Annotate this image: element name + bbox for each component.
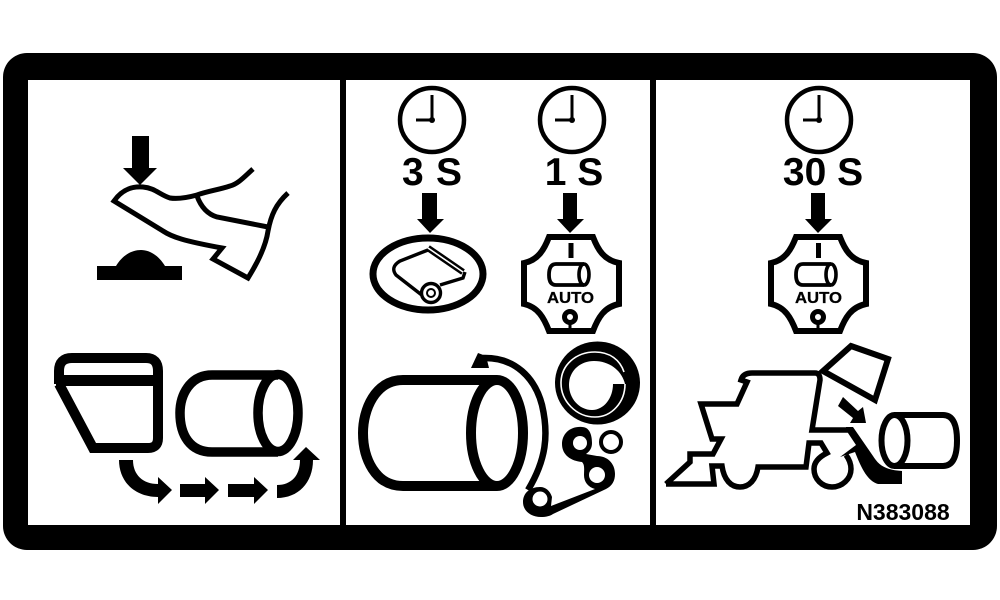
icon: clock 30 s bbox=[787, 88, 851, 152]
icon: arrow bbox=[417, 193, 444, 233]
icon: diagonal arrow bbox=[838, 397, 866, 423]
icon: clock 3 s bbox=[400, 88, 464, 152]
panel: wait and eject bbox=[666, 88, 957, 525]
icon: curved arrow out bbox=[119, 460, 172, 504]
text: 1 S: 1 S bbox=[545, 151, 603, 194]
icon: down arrow onto foot bbox=[123, 136, 157, 185]
icon: auto knob: AUTO bbox=[795, 290, 842, 307]
icon: baler machine bbox=[666, 373, 902, 487]
icon: pulleys and belt bbox=[523, 427, 621, 517]
panel: timers and controls bbox=[363, 88, 640, 517]
icon: net roll bbox=[555, 342, 640, 424]
icon: rotation arrow with belt bbox=[471, 353, 545, 490]
icon: straight arrow bbox=[228, 477, 268, 504]
icon: straight arrow bbox=[180, 477, 219, 504]
icon: auto knob bbox=[771, 237, 866, 331]
text: part number: N383088 bbox=[856, 499, 950, 525]
icon: large bale bbox=[363, 380, 523, 486]
icon: ejecting bale in chamber bbox=[823, 346, 888, 400]
icon: arrow bbox=[805, 193, 832, 233]
icon: auto knob bbox=[524, 237, 619, 331]
icon: net wrap button bbox=[373, 238, 483, 310]
panel: press pedal, bale chamber bbox=[56, 136, 320, 504]
icon: bale cylinder bbox=[180, 374, 298, 452]
icon: arrow bbox=[557, 193, 584, 233]
icon: ejected bale bbox=[882, 415, 957, 466]
text: 30 S: 30 S bbox=[783, 151, 863, 194]
icon: clock 1 s bbox=[540, 88, 604, 152]
icon: curved arrow up bbox=[277, 447, 320, 498]
icon: bucket bbox=[56, 358, 160, 448]
text: 3 S: 3 S bbox=[402, 151, 462, 194]
icon: foot on pedal bbox=[114, 169, 288, 278]
icon: pedal button bbox=[97, 250, 182, 280]
icon: auto knob: AUTO bbox=[547, 290, 594, 307]
